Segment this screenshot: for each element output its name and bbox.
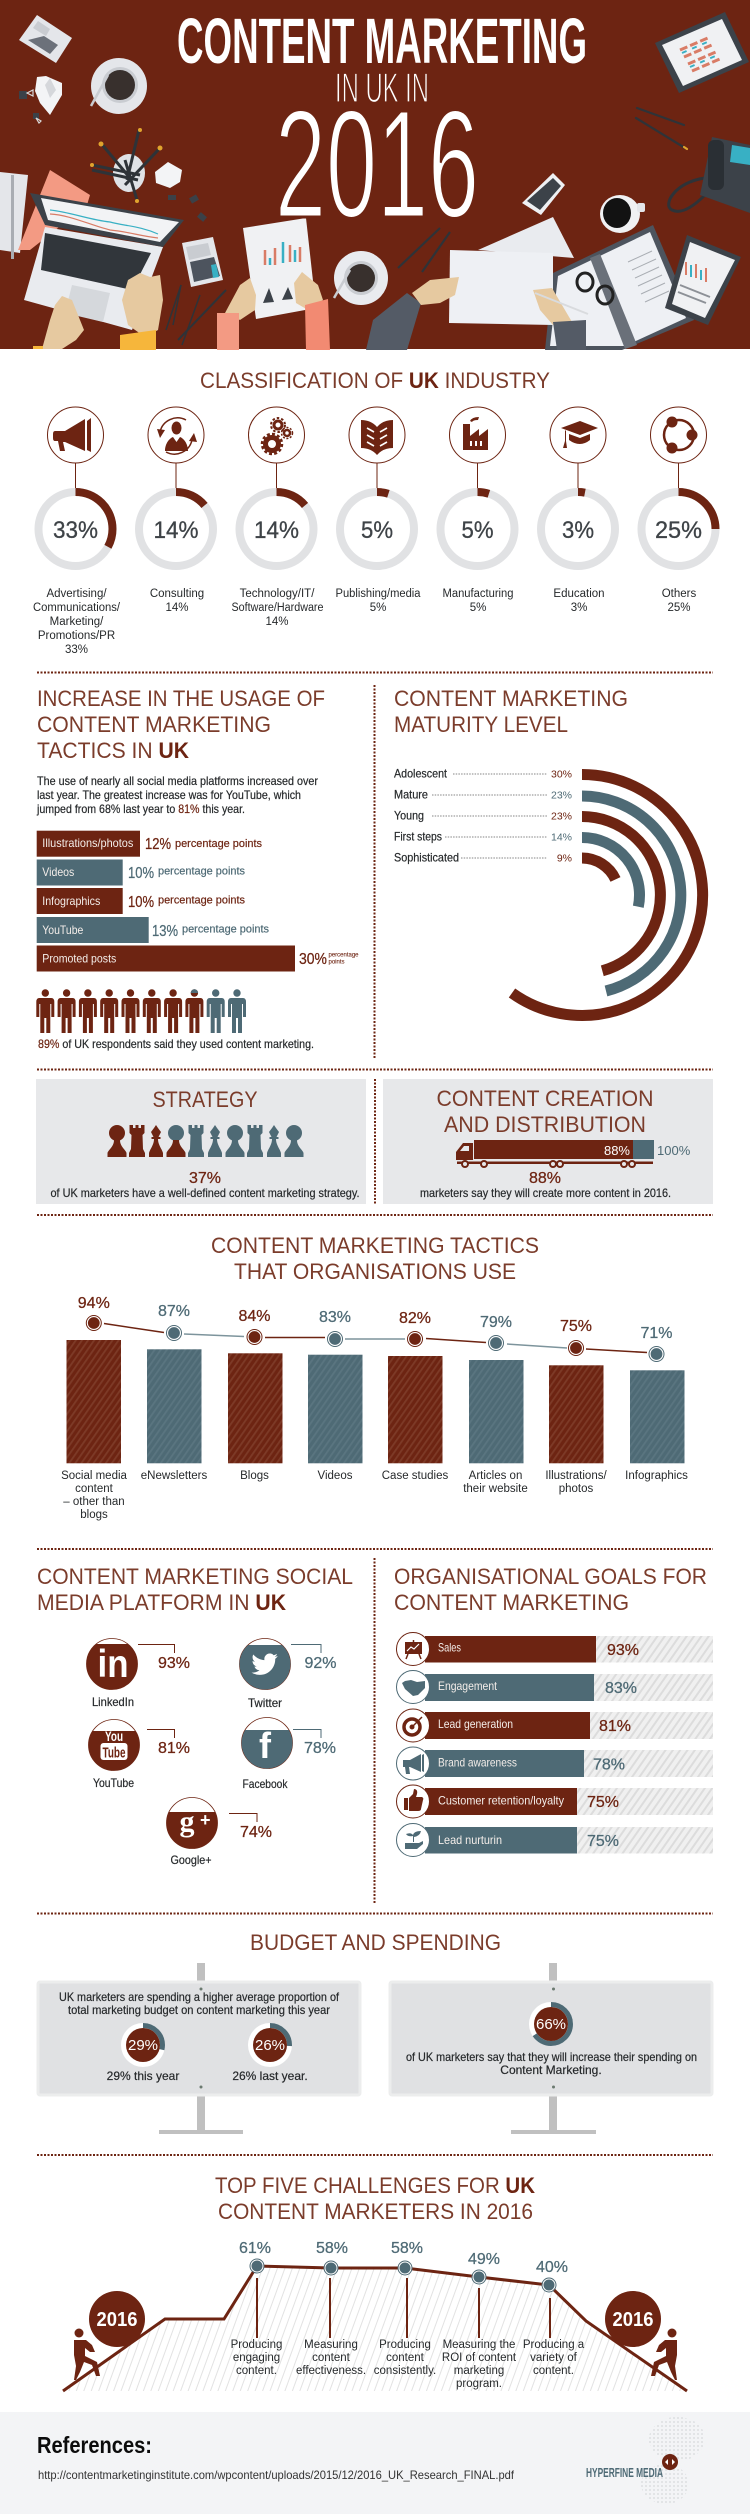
- heading: content creation: [436, 1086, 654, 1137]
- legend: maturity: 30%: [551, 768, 572, 780]
- text block: budget proportion: total marketing budget on content marketing this year: [68, 2003, 330, 2017]
- icon: coffee cup top left: [91, 58, 147, 114]
- donut: 26%: 26%: [255, 2037, 285, 2054]
- heading: maturity level: [394, 686, 628, 737]
- dotted dividers: [37, 672, 713, 2155]
- labels: challenges: Producing a: [523, 2339, 585, 2351]
- item: education 3%: [541, 407, 615, 614]
- icon: coffee cup middle: [334, 251, 388, 305]
- item: education 3%: 3%: [562, 517, 594, 544]
- bar chart: percentage points: 10%: [128, 865, 154, 882]
- item: LinkedIn 93%: [86, 1638, 190, 1709]
- labels: tactics: [61, 1470, 688, 1521]
- legend: maturity: 23%: [551, 790, 572, 802]
- icon: open book: [361, 420, 393, 455]
- heading: increase in usage: INCREASE IN THE USAGE OF: [37, 686, 325, 711]
- panel: billboard left: [38, 1963, 360, 2134]
- values: tactics percentages: 87%: [158, 1303, 190, 1320]
- heading: tactics: CONTENT MARKETING TACTICS: [211, 1233, 539, 1258]
- text block: reference URL: http://contentmarketinginstitute.com/wpcontent/uploads/2015/12/2016_UK_Research_FINAL.pdf: [38, 2468, 515, 2482]
- bar chart: percentage points: YouTube: [42, 923, 84, 937]
- item: Twitter 92%: 92%: [304, 1655, 337, 1672]
- bar chart: percentage points: 13%: [152, 923, 178, 940]
- icon: crumpled paper middle: [155, 162, 182, 188]
- labels: tactics: content: [75, 1483, 114, 1495]
- heading: increase in usage: TACTICS IN UK: [37, 738, 189, 763]
- icon: right figure pushing boulder: [605, 2291, 677, 2380]
- donut: 66%: [529, 2002, 573, 2046]
- item: Facebook 78%: Facebook: [242, 1777, 288, 1791]
- icon: laptop: [24, 193, 184, 330]
- panel: strategy: [36, 1079, 366, 1204]
- item: advertising 33%: [33, 407, 121, 656]
- bar: brand awareness 78%: [396, 1747, 713, 1780]
- heading: increase in usage: [37, 686, 325, 763]
- icon: sleeves: [33, 330, 156, 350]
- bar: engagement 83%: Engagement: [438, 1679, 498, 1693]
- heading: maturity level: CONTENT MARKETING: [394, 686, 628, 711]
- values: tactics percentages: 75%: [560, 1318, 592, 1335]
- panel: billboard right: [390, 1963, 712, 2134]
- labels: challenges: Measuring: [304, 2339, 358, 2351]
- values: tactics percentages: 79%: [480, 1314, 512, 1331]
- labels: challenges: content.: [533, 2365, 574, 2377]
- labels: tactics: photos: [559, 1483, 594, 1495]
- item: consulting 14%: 14%: [154, 517, 198, 544]
- item: advertising 33%: 33%: [53, 517, 98, 544]
- heading: tactics: THAT ORGANISATIONS USE: [234, 1259, 516, 1284]
- item: YouTube 81%: Tube: [102, 1744, 126, 1762]
- icon: businessman arm and hands: [366, 277, 588, 350]
- caption: strategy: of UK marketers have a well-defined content marketing strategy.: [50, 1186, 360, 1200]
- icon: tablet top right: [655, 12, 749, 93]
- donut: 66%: 66%: [536, 2016, 566, 2033]
- values: tactics percentages: 84%: [238, 1308, 271, 1325]
- bar chart: percentage points: [37, 831, 359, 972]
- icon: factory: [463, 417, 488, 450]
- icon: binder clips: [19, 90, 41, 123]
- item: manufacturing 5%: 5%: [462, 517, 494, 544]
- labels: tactics: Illustrations/: [545, 1470, 607, 1482]
- item: Google+ 74%: 74%: [240, 1824, 272, 1841]
- line chart: trend: [86, 1316, 664, 1362]
- item: advertising 33%: Marketing/: [50, 616, 104, 628]
- heading: challenges: TOP FIVE CHALLENGES FOR UK: [215, 2173, 535, 2198]
- icon: drafting tools: [166, 285, 226, 345]
- heading: content creation: CONTENT CREATION: [436, 1086, 654, 1111]
- bar: customer retention 75%: [396, 1785, 713, 1818]
- icon: cycle nodes: [664, 416, 698, 454]
- bar: sales 93%: Sales: [438, 1640, 461, 1654]
- bar: sales 93%: [396, 1632, 713, 1666]
- panel: maturity level: [394, 686, 703, 1016]
- item: technology 14%: 14%: [265, 616, 289, 628]
- labels: tactics: blogs: [80, 1509, 108, 1521]
- values: challenges percentages: 58%: [391, 2240, 423, 2257]
- heading: organisational goals: CONTENT MARKETING: [394, 1590, 629, 1615]
- bar chart: percentage points: points: [328, 960, 345, 966]
- text block: intro paragraph: jumped from 68% last year to 81% this year.: [36, 802, 245, 816]
- item: Google+ 74%: +: [200, 1810, 211, 1830]
- labels: tactics: Articles on: [469, 1470, 522, 1482]
- legend: maturity: 9%: [557, 852, 572, 864]
- item: Google+ 74%: g: [180, 1805, 194, 1838]
- labels: tactics: eNewsletters: [141, 1470, 207, 1482]
- captions: this year and last year: 29% this year: [107, 2069, 179, 2083]
- item: consulting 14%: [139, 407, 213, 614]
- item: education 3%: Education: [553, 588, 605, 600]
- labels: challenges: consistently.: [374, 2365, 436, 2377]
- bar chart: tactics: [66, 1340, 684, 1463]
- heading: challenges: CONTENT MARKETERS IN 2016: [218, 2199, 533, 2224]
- legend: maturity: First steps: [394, 830, 442, 844]
- heading: maturity level: MATURITY LEVEL: [394, 712, 568, 737]
- item: Facebook 78%: f: [259, 1725, 272, 1766]
- item: Google+ 74%: Google+: [170, 1853, 212, 1867]
- title year: 2016: [275, 78, 479, 250]
- legend: maturity: Adolescent: [394, 766, 448, 780]
- bar chart: percentage points: percentage points: [158, 866, 245, 878]
- text block: spending increase: [406, 2050, 697, 2077]
- icon: consultant: [157, 418, 197, 454]
- bar chart: percentage points: percentage points: [158, 894, 245, 906]
- bar chart: percentage points: 10%: [128, 894, 154, 911]
- icon: thumbs up: [404, 1789, 423, 1811]
- item: others 25%: [642, 407, 716, 614]
- pictogram: chess pieces: [108, 1125, 304, 1157]
- icon: easel chart: [405, 1640, 422, 1659]
- caption: content creation: marketers say they will create more content in 2016.: [420, 1186, 671, 1200]
- labels: challenges: ROI of content: [442, 2352, 517, 2364]
- values: tactics percentages: 94%: [78, 1295, 110, 1312]
- icon: notebook left: [0, 170, 90, 259]
- values: challenges percentages: [239, 2240, 568, 2276]
- heading: content creation: AND DISTRIBUTION: [444, 1112, 646, 1137]
- panel: top five challenges: [63, 2173, 687, 2391]
- icon: megaphone: [53, 418, 91, 452]
- donut: 29%: 29%: [128, 2037, 158, 2054]
- item: technology 14%: Software/Hardware: [232, 602, 324, 614]
- panel: classification of UK industry: [33, 407, 716, 656]
- values: tactics percentages: 71%: [640, 1325, 673, 1342]
- heading: increase in usage: CONTENT MARKETING: [37, 712, 271, 737]
- captions: this year and last year: 26% last year.: [232, 2069, 308, 2083]
- item: manufacturing 5%: Manufacturing: [442, 588, 514, 600]
- heading: references: References:: [37, 2432, 152, 2458]
- stat: 37%: 37%: [189, 1170, 221, 1187]
- labels: challenges: content.: [236, 2365, 277, 2377]
- icon: desk telephone: [669, 137, 750, 213]
- bar chart: percentage points: 12%: [145, 836, 171, 853]
- icon: binder clips middle: [168, 194, 207, 222]
- text block: spending increase: of UK marketers say that they will increase their spending on: [406, 2050, 697, 2064]
- values: challenges percentages: 49%: [468, 2251, 500, 2268]
- icon: tablet bottom right: [665, 235, 741, 325]
- item: education 3%: 3%: [571, 602, 587, 614]
- item: Facebook 78%: [241, 1718, 336, 1791]
- labels: challenges: content: [312, 2352, 351, 2364]
- values: tactics percentages: 82%: [399, 1310, 431, 1327]
- labels: challenges: [231, 2339, 585, 2390]
- legend: maturity: Mature: [394, 788, 428, 802]
- logo: Hyperfine Media: [586, 2417, 705, 2504]
- item: others 25%: 25%: [667, 602, 691, 614]
- panel: content creation and distribution: [383, 1079, 713, 1204]
- item: publishing 5%: [336, 407, 421, 614]
- chart: concentric arcs: [512, 774, 703, 1016]
- text block: budget proportion: UK marketers are spending a higher average proportion of: [59, 1990, 340, 2004]
- bar: engagement 83%: [396, 1670, 713, 1704]
- icon: glasses: [577, 273, 613, 304]
- bar: lead nurturing 75%: 75%: [587, 1833, 619, 1850]
- labels: challenges: variety of: [530, 2352, 578, 2364]
- caption: 89% respondents: 89% of UK respondents said they used content marketing.: [38, 1037, 314, 1051]
- labels: tactics: Social media: [61, 1470, 128, 1482]
- item: consulting 14%: 14%: [165, 602, 189, 614]
- bar: customer retention 75%: 75%: [587, 1794, 619, 1811]
- legend: maturity: Sophisticated: [394, 850, 459, 864]
- labels: challenges: content: [386, 2352, 425, 2364]
- text block: budget proportion: [59, 1990, 340, 2017]
- labels: challenges: Measuring the: [443, 2339, 515, 2351]
- icon: pens top right: [636, 108, 687, 149]
- footer: references: [0, 2412, 750, 2514]
- labels: tactics: Infographics: [625, 1470, 688, 1482]
- labels: tactics: Case studies: [382, 1470, 448, 1482]
- bar chart: percentage points: Infographics: [42, 894, 100, 908]
- bar: lead generation 81%: Lead generation: [438, 1717, 513, 1731]
- icon: paper report: [243, 218, 316, 319]
- chart: truck bar 88%: [456, 1140, 691, 1167]
- bar chart: percentage points: percentage points: [175, 838, 262, 850]
- item: advertising 33%: Advertising/: [46, 588, 107, 600]
- icon: plant in hand: [405, 1831, 423, 1849]
- icon: megaphone: [403, 1754, 424, 1774]
- legend: maturity: Young: [394, 808, 424, 822]
- icon: pens middle: [398, 228, 450, 272]
- item: LinkedIn 93%: 93%: [158, 1655, 190, 1672]
- icon: crumpled paper: [35, 76, 62, 115]
- labels: tactics: their website: [463, 1483, 528, 1495]
- text block: intro paragraph: The use of nearly all social media platforms increased over: [37, 774, 318, 788]
- pictogram: 89% people: [36, 989, 246, 1033]
- item: Twitter 92%: [239, 1638, 337, 1710]
- heading: challenges: [215, 2173, 535, 2224]
- heading: social media: CONTENT MARKETING SOCIAL: [37, 1564, 353, 1589]
- item: advertising 33%: Promotions/PR: [38, 630, 115, 642]
- subtitle: IN UK IN: [335, 64, 429, 111]
- values: tactics percentages: [78, 1295, 673, 1342]
- donut: 26%: [248, 2023, 292, 2067]
- heading: tactics: [211, 1233, 539, 1284]
- heading: social media: [37, 1564, 353, 1615]
- item: others 25%: Others: [662, 588, 697, 600]
- captions: this year and last year: [107, 2069, 308, 2083]
- item: manufacturing 5%: [440, 407, 514, 614]
- heading: budget: BUDGET AND SPENDING: [250, 1930, 501, 1955]
- item: YouTube 81%: [88, 1720, 190, 1790]
- chart: truck bar 88%: 88%: [604, 1143, 630, 1158]
- labels: challenges: marketing: [454, 2365, 504, 2377]
- item: Google+ 74%: [166, 1798, 272, 1867]
- icon: gears: [262, 418, 292, 454]
- text block: intro paragraph: last year. The greatest increase was for YouTube, which: [37, 788, 301, 802]
- bar: lead nurturing 75%: Lead nurturin: [438, 1833, 502, 1847]
- icon: small calculator: [182, 237, 223, 287]
- legend: maturity: 23%: [551, 810, 572, 822]
- icon: handshake: [402, 1680, 425, 1696]
- labels: tactics: – other than: [63, 1496, 125, 1508]
- item: technology 14%: Technology/IT/: [240, 588, 315, 600]
- donut: 29%: [121, 2023, 165, 2067]
- heading: social media: MEDIA PLATFORM IN UK: [37, 1590, 286, 1615]
- item: publishing 5%: 5%: [361, 517, 393, 544]
- bar chart: percentage points: Videos: [42, 865, 74, 879]
- bar chart: percentage points: Promoted posts: [42, 952, 116, 966]
- labels: challenges: engaging: [233, 2352, 280, 2364]
- item: Twitter 92%: Twitter: [248, 1696, 282, 1710]
- item: technology 14%: 14%: [254, 517, 299, 544]
- bar: lead generation 81%: [396, 1709, 713, 1742]
- bar: brand awareness 78%: 78%: [593, 1756, 625, 1774]
- item: advertising 33%: 33%: [65, 644, 88, 656]
- icon: graduation cap: [561, 421, 598, 448]
- item: LinkedIn 93%: LinkedIn: [92, 1695, 134, 1709]
- item: others 25%: 25%: [655, 517, 702, 544]
- icon: left figure pushing boulder: [74, 2291, 145, 2380]
- chart: hill line: [63, 2259, 687, 2391]
- panel: social media platforms: [37, 1564, 353, 1867]
- item: publishing 5%: 5%: [370, 602, 386, 614]
- labels: challenges: Producing: [379, 2339, 431, 2351]
- icon: typing hands: [42, 273, 163, 349]
- values: challenges percentages: 61%: [239, 2240, 271, 2257]
- panel: organisational goals: [394, 1564, 713, 1856]
- labels: tactics: Videos: [318, 1470, 353, 1482]
- heading: organisational goals: ORGANISATIONAL GOALS FOR: [394, 1564, 707, 1589]
- header banner: [0, 0, 750, 350]
- legend: maturity: [394, 766, 572, 864]
- panel: increase in usage of tactics: [36, 686, 359, 1051]
- values: challenges percentages: 40%: [536, 2259, 568, 2276]
- values: challenges percentages: 58%: [316, 2240, 348, 2257]
- chart: truck bar 88%: 100%: [657, 1143, 691, 1158]
- icon: right figure pushing boulder: 2016: [612, 2309, 654, 2331]
- bar: engagement 83%: 83%: [605, 1680, 637, 1697]
- icon: left figure pushing boulder: 2016: [96, 2309, 138, 2331]
- bar: brand awareness 78%: Brand awareness: [438, 1756, 517, 1770]
- icon: smartphone: [522, 173, 565, 215]
- heading: strategy: STRATEGY: [152, 1087, 258, 1112]
- item: technology 14%: [232, 407, 324, 628]
- bar: sales 93%: 93%: [607, 1642, 639, 1659]
- legend: maturity: 14%: [551, 832, 572, 844]
- icon: target: [404, 1717, 422, 1735]
- panel: tactics that organisations use: [61, 1233, 688, 1521]
- labels: tactics: Blogs: [240, 1470, 269, 1482]
- item: publishing 5%: Publishing/media: [336, 588, 421, 600]
- icon: black coffee cup: [600, 195, 645, 233]
- labels: challenges: effectiveness.: [296, 2365, 366, 2377]
- item: consulting 14%: Consulting: [150, 588, 204, 600]
- icon: pencil cup: [90, 128, 162, 203]
- logo: Hyperfine Media: HYPERFINE MEDIA: [586, 2465, 663, 2480]
- item: YouTube 81%: YouTube: [93, 1776, 134, 1790]
- labels: challenges: program.: [456, 2378, 502, 2390]
- text block: intro paragraph: [36, 774, 318, 816]
- bar: customer retention 75%: Customer retention/loyalty: [438, 1794, 564, 1808]
- icon: hands and salmon sleeves: [217, 272, 330, 350]
- values: tactics percentages: 83%: [319, 1309, 351, 1326]
- item: Facebook 78%: 78%: [304, 1740, 336, 1757]
- item: advertising 33%: Communications/: [33, 602, 121, 614]
- labels: challenges: Producing: [231, 2339, 282, 2351]
- icon: papers and notebook: [449, 217, 694, 350]
- item: manufacturing 5%: 5%: [470, 602, 486, 614]
- bar chart: percentage points: percentage points: [182, 924, 269, 936]
- bar chart: percentage points: percentage: [328, 952, 359, 958]
- bar chart: percentage points: Illustrations/photos: [42, 836, 133, 850]
- item: YouTube 81%: 81%: [158, 1740, 190, 1757]
- heading: organisational goals: [394, 1564, 707, 1615]
- item: LinkedIn 93%: in: [98, 1643, 128, 1686]
- icon: calculator top left: [19, 15, 72, 63]
- bar chart: percentage points: 30%: [299, 951, 327, 968]
- heading: classification: CLASSIFICATION OF UK INDUSTRY: [200, 368, 550, 393]
- stat: 88%: 88%: [529, 1170, 561, 1187]
- bar: lead nurturing 75%: [396, 1824, 713, 1856]
- bar: lead generation 81%: 81%: [599, 1718, 631, 1735]
- item: YouTube 81%: You: [105, 1728, 123, 1744]
- text block: spending increase: Content Marketing.: [500, 2063, 602, 2077]
